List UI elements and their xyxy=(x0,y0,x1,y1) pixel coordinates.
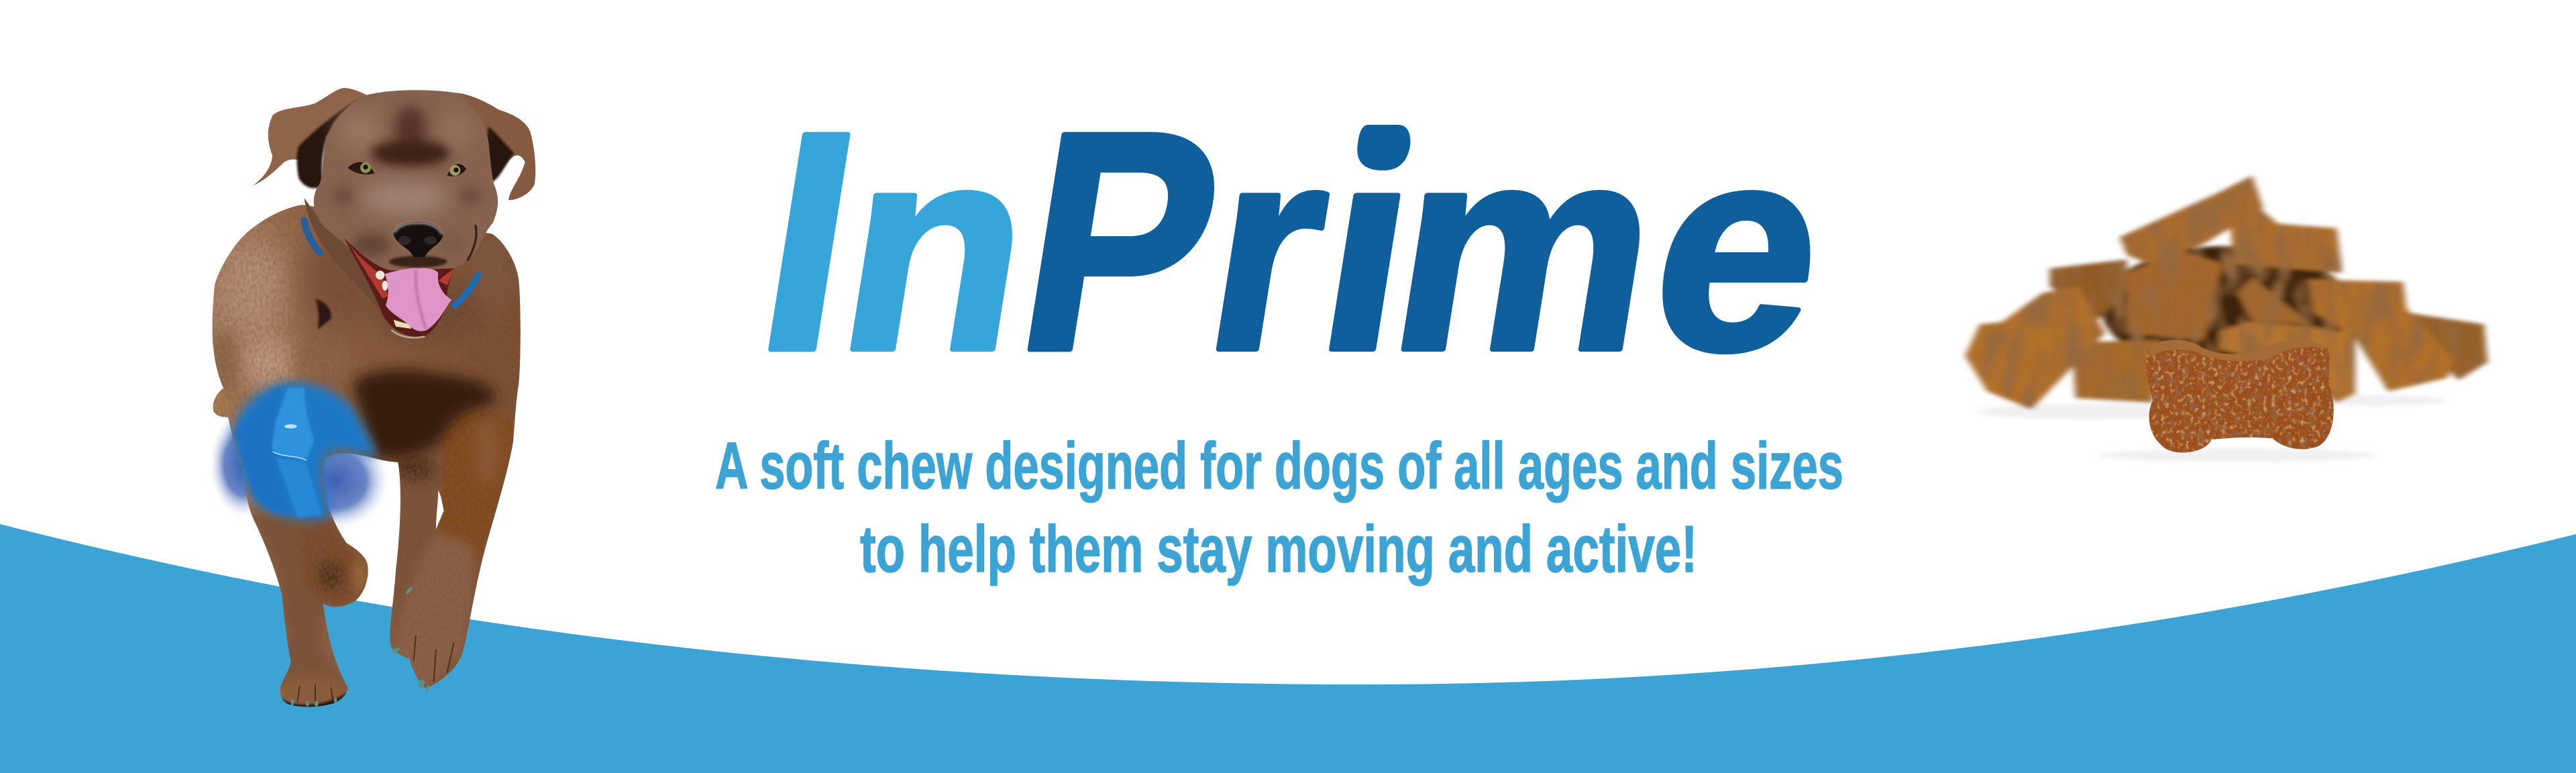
logo part: In: n xyxy=(822,87,1053,411)
neck fold xyxy=(304,198,380,310)
front bone-shaped chew xyxy=(2146,340,2334,453)
blue wave background xyxy=(0,524,2576,773)
knee glow halo xyxy=(208,409,391,531)
eyes xyxy=(347,162,466,176)
dark chest fold xyxy=(315,299,331,330)
left ear xyxy=(253,88,367,189)
right ear xyxy=(456,93,535,200)
logo part: Prime: e xyxy=(1633,86,1845,411)
tagline xyxy=(715,429,1843,586)
dog silhouette with fur shading xyxy=(212,205,521,707)
paw nails xyxy=(291,586,431,707)
tagline line 1: A soft chew designed for dogs of all ages and sizes xyxy=(715,429,1843,503)
logo part: Prime: m xyxy=(1374,87,1679,411)
dog head xyxy=(253,88,535,338)
photo: chocolate labrador dog running xyxy=(201,88,537,719)
nose xyxy=(394,221,443,257)
logo part: In xyxy=(741,68,1053,415)
open mouth xyxy=(344,225,476,338)
knee x-ray overlay xyxy=(233,382,378,519)
paw toe creases xyxy=(297,635,454,704)
collar xyxy=(304,220,478,305)
chew shadows xyxy=(1976,395,2447,462)
tongue xyxy=(384,268,451,331)
foot underside shadow xyxy=(282,692,346,707)
photo: pile of bone-shaped soft chews xyxy=(1965,176,2487,462)
dark belly shadow xyxy=(354,370,495,459)
logo part: In: I xyxy=(741,68,878,415)
dog body and legs xyxy=(212,205,521,707)
logo part: Prime: i xyxy=(1301,87,1436,411)
gap between rear and front leg xyxy=(436,490,444,529)
logo part: Prime: r xyxy=(1189,87,1348,411)
logo: InPrime xyxy=(768,125,1810,354)
blurred chew pile xyxy=(1965,176,2487,409)
tagline line 2: to help them stay moving and active! xyxy=(860,512,1697,586)
skull and muzzle xyxy=(314,90,498,272)
logo part: Prime: P xyxy=(1001,68,1241,415)
logo part: Prime xyxy=(1028,125,1810,354)
